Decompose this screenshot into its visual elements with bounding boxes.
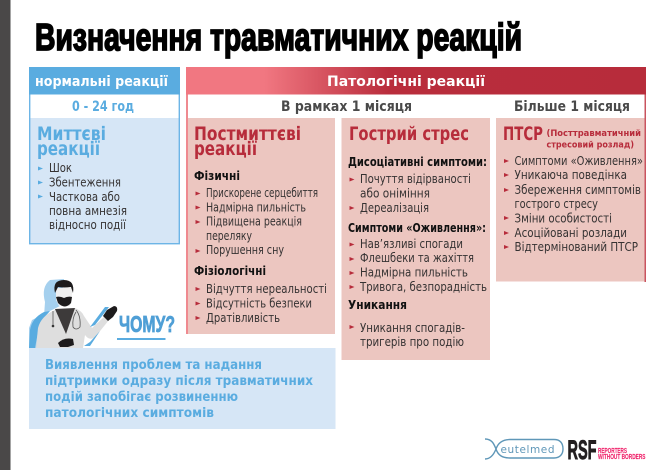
panel: post-immediate reactions: Постмиттєві — [194, 124, 301, 145]
panel: PTSD: (Посттравматичний — [546, 129, 641, 139]
panel: post-immediate reactions: переляку — [206, 229, 252, 243]
panel: post-immediate reactions: Фізичні — [194, 169, 240, 183]
panel: PTSD: Уникаюча поведінка — [514, 168, 627, 182]
header: pathological reactions: Патологічні реакції — [327, 74, 485, 90]
list: immediate reactions — [38, 161, 127, 232]
logo: RSF reporters without borders — [568, 435, 646, 465]
panel: post-immediate reactions: Прискорене серцебиття — [206, 186, 318, 200]
panel: acute stress: Нав’язливі спогади — [360, 237, 463, 251]
heading: immediate reactions — [37, 124, 106, 160]
panel: post-immediate reactions: Порушення сну — [206, 243, 284, 257]
panel: acute stress: Надмірна пильність — [360, 266, 468, 280]
panel: post-immediate reactions — [188, 118, 335, 334]
callout: why explanation: підтримки одразу після травматичних — [45, 373, 313, 389]
panel: PTSD — [496, 118, 644, 282]
header: normal reactions: нормальні реакції — [35, 74, 168, 90]
panel: post-immediate reactions: Дратівливість — [206, 311, 280, 325]
panel: PTSD: ПТСР — [503, 124, 543, 145]
list: immediate reactions: Збентеження — [49, 176, 121, 190]
logo: eutelmed: eutelmed — [500, 444, 554, 456]
panel: acute stress: Почуття відірваності — [360, 172, 471, 186]
list: immediate reactions: Часткова або — [49, 190, 120, 204]
panel: PTSD: Асоційовані розлади — [514, 226, 627, 240]
why label: ЧОМУ? — [119, 311, 175, 337]
heading: immediate reactions: реакції — [37, 139, 100, 160]
left dark side bar — [0, 0, 10, 470]
icon: doctor illustration — [29, 279, 117, 348]
panel: post-immediate reactions: Відчуття нереальності — [206, 282, 327, 296]
panel: normal reactions — [29, 67, 180, 244]
panel: pathological reactions — [186, 67, 646, 360]
panel: acute stress: Флешбеки та жахіття — [360, 251, 474, 265]
panel: acute stress: або оніміння — [360, 186, 430, 200]
header: normal reactions — [29, 67, 180, 94]
panel: PTSD: Зміни особистості — [514, 212, 612, 226]
callout: why explanation: патологічних симптомів — [45, 405, 214, 421]
panel: post-immediate reactions: Підвищена реакція — [206, 214, 302, 228]
logo: RSF reporters without borders: REPORTERS — [598, 448, 627, 455]
time range label: 0 - 24 год — [72, 99, 134, 115]
panel: PTSD: Збереження симптомів — [514, 183, 641, 197]
panel: post-immediate reactions: реакції — [194, 139, 257, 160]
logo: eutelmed — [485, 439, 563, 459]
panel: acute stress: Уникання — [348, 298, 407, 312]
list: immediate reactions: відносно події — [49, 218, 127, 232]
heading: immediate reactions: Миттєві — [37, 124, 106, 145]
panel: post-immediate reactions: Відсутність безпеки — [206, 296, 312, 310]
panel: acute stress: Тривога, безпорадність — [359, 280, 487, 294]
panel: PTSD: Відтермінований ПТСР — [514, 240, 638, 254]
callout: why explanation: Виявлення проблем та надання — [45, 357, 262, 373]
panel: acute stress: тригерів про подію — [360, 335, 464, 349]
panel: PTSD: гострого стресу — [514, 197, 598, 211]
panel: acute stress — [342, 118, 490, 360]
column label: more than 1 month: Більше 1 місяця — [514, 99, 630, 115]
list: immediate reactions: Шок — [49, 161, 72, 175]
why label — [117, 311, 175, 340]
list: immediate reactions: повна амнезія — [49, 204, 127, 218]
panel: acute stress: Симптоми «Оживлення»: — [348, 221, 486, 235]
callout: why explanation: подій запобігає розвиненню — [45, 389, 238, 405]
logo: RSF reporters without borders: RSF — [568, 435, 596, 465]
callout: why explanation — [29, 348, 336, 429]
panel: acute stress: Дисоціативні симптоми: — [348, 155, 487, 169]
panel: acute stress: Гострий стрес — [349, 124, 469, 145]
panel: acute stress: Дереалізація — [360, 201, 429, 215]
panel: PTSD: стресовий розлад) — [546, 140, 634, 150]
panel: acute stress: Уникання спогадів- — [360, 321, 465, 335]
header: pathological reactions — [186, 67, 646, 94]
panel: post-immediate reactions: Надмірна пильність — [206, 200, 306, 214]
panel: post-immediate reactions: Фізіологічні — [194, 264, 266, 278]
column label: within 1 month: В рамках 1 місяця — [281, 99, 412, 115]
